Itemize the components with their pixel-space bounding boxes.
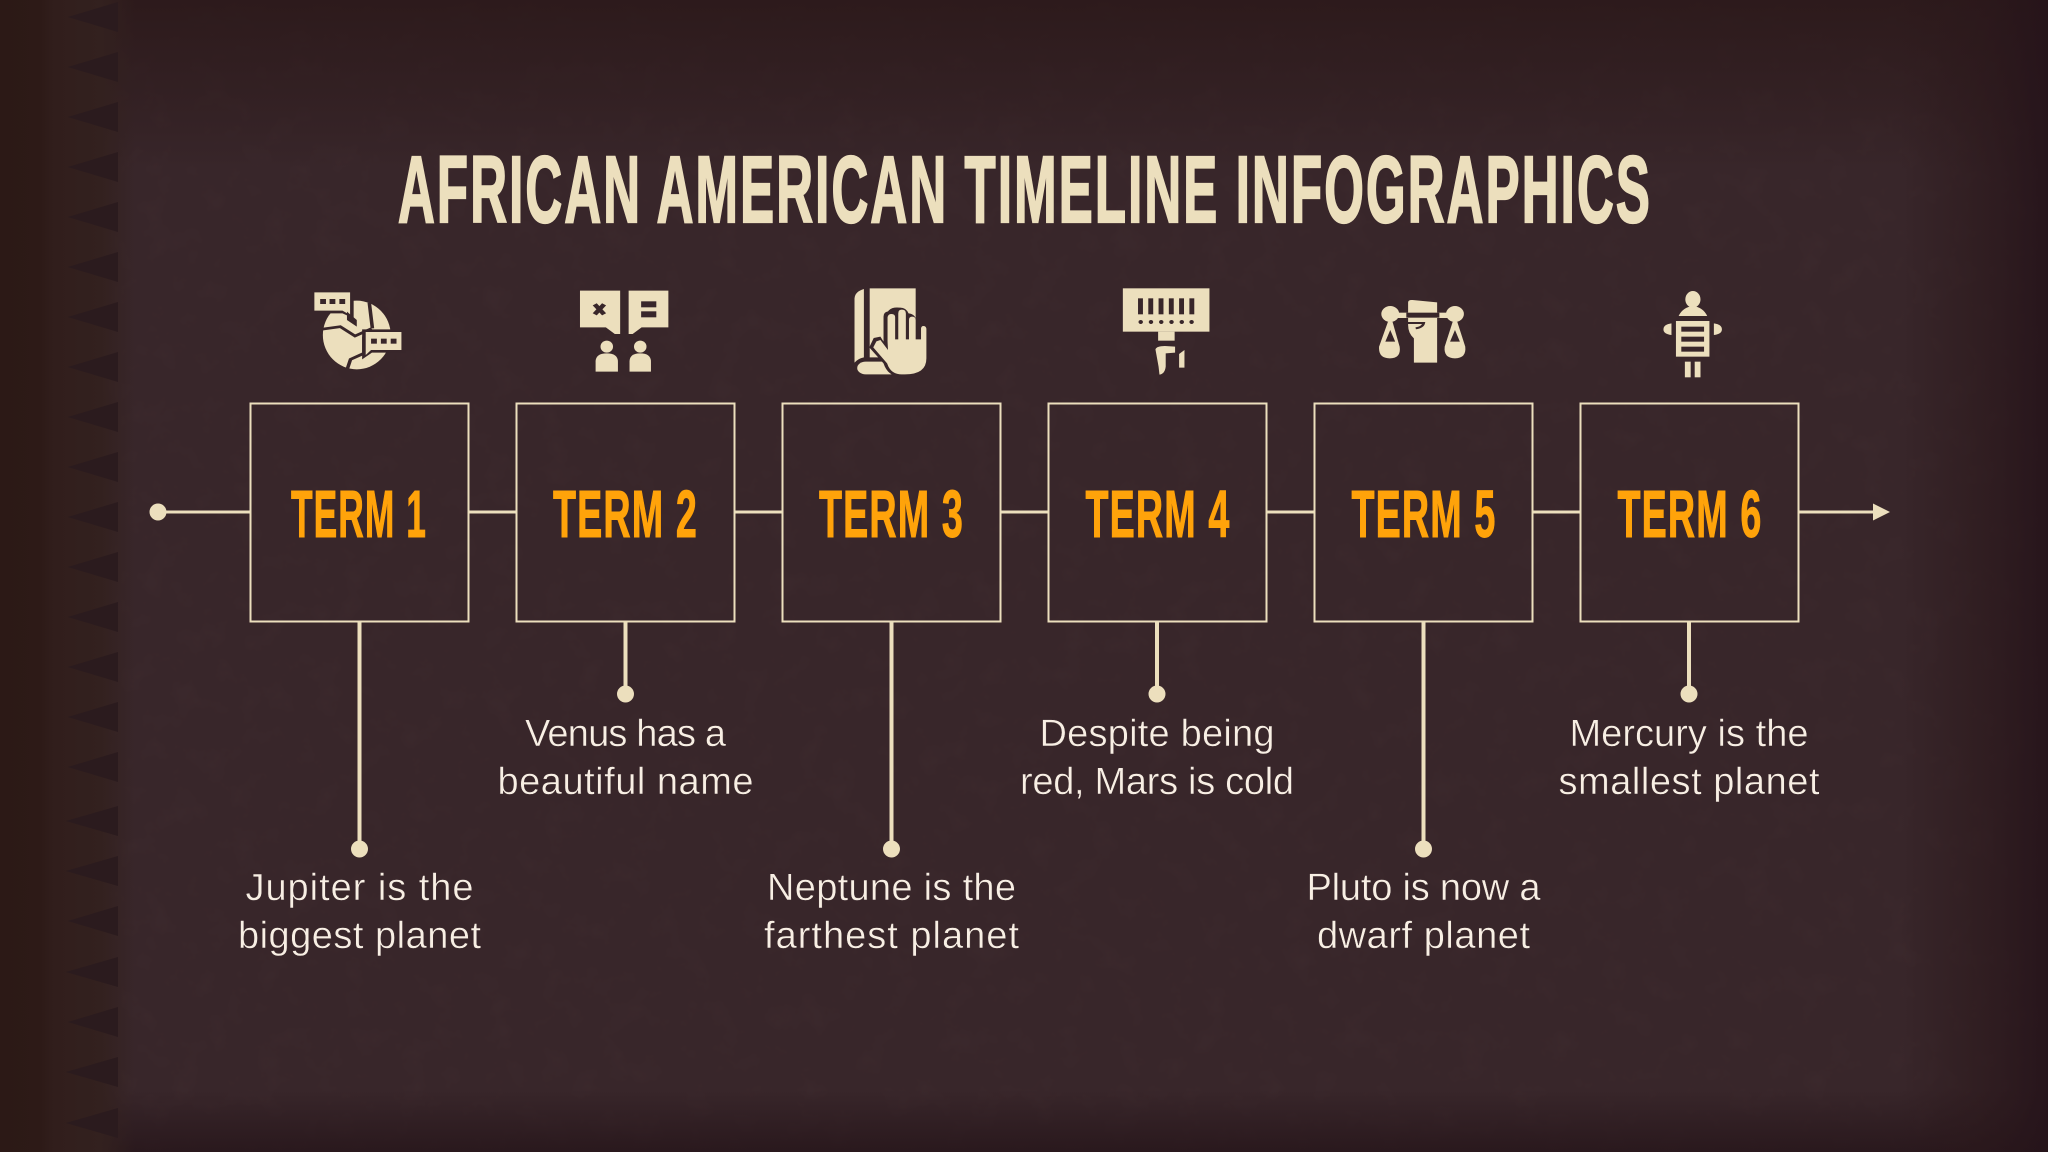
box — [1314, 404, 1532, 622]
description: Jupiter is the — [246, 867, 474, 909]
description: Neptune is the — [767, 867, 1016, 909]
panel: term 5 — [1306, 300, 1541, 957]
icon: globe with speech bubbles — [311, 290, 406, 370]
panel: term 3 — [764, 288, 1019, 957]
description: Pluto is now a — [1306, 867, 1541, 909]
description — [1306, 867, 1541, 957]
panel: term 6 — [1558, 291, 1820, 803]
description — [1558, 713, 1820, 803]
panel: term 2 — [498, 291, 754, 803]
label: TERM 1 — [291, 477, 427, 552]
icon: hand on a book — [855, 288, 930, 377]
panel: term 4 — [1020, 288, 1294, 803]
connector — [1148, 622, 1166, 702]
description: red, Mars is cold — [1020, 761, 1294, 803]
description: biggest planet — [238, 915, 481, 957]
panel: term 1 — [238, 290, 481, 957]
box — [250, 404, 468, 622]
icon: debate speech bubbles and people — [580, 291, 668, 372]
icon: fist holding scales — [1379, 300, 1465, 363]
description — [238, 867, 481, 957]
description — [1020, 713, 1294, 803]
timeline axis with start dot and end arrow — [150, 504, 1890, 520]
description: Despite being — [1040, 713, 1274, 755]
description: dwarf planet — [1317, 915, 1530, 957]
connector — [617, 622, 634, 702]
box — [516, 404, 734, 622]
description: beautiful name — [498, 761, 754, 803]
description — [498, 713, 754, 803]
description: Mercury is the — [1570, 713, 1808, 755]
connector — [1680, 622, 1698, 702]
label: TERM 5 — [1352, 477, 1496, 552]
connector — [351, 622, 368, 858]
label: TERM 3 — [819, 477, 964, 552]
connector — [883, 622, 900, 858]
description: Venus has a — [525, 713, 727, 755]
description: farthest planet — [764, 915, 1019, 957]
icon: person wearing a placard — [1663, 291, 1722, 377]
box — [1048, 404, 1266, 622]
box — [782, 404, 1000, 622]
description: smallest planet — [1558, 761, 1820, 803]
description — [764, 867, 1019, 957]
label: TERM 2 — [553, 477, 698, 552]
label: TERM 6 — [1618, 477, 1762, 552]
box — [1580, 404, 1798, 622]
connector — [1415, 622, 1432, 858]
label: TERM 4 — [1086, 477, 1230, 552]
icon: sign with barcode and hand — [1123, 288, 1209, 375]
